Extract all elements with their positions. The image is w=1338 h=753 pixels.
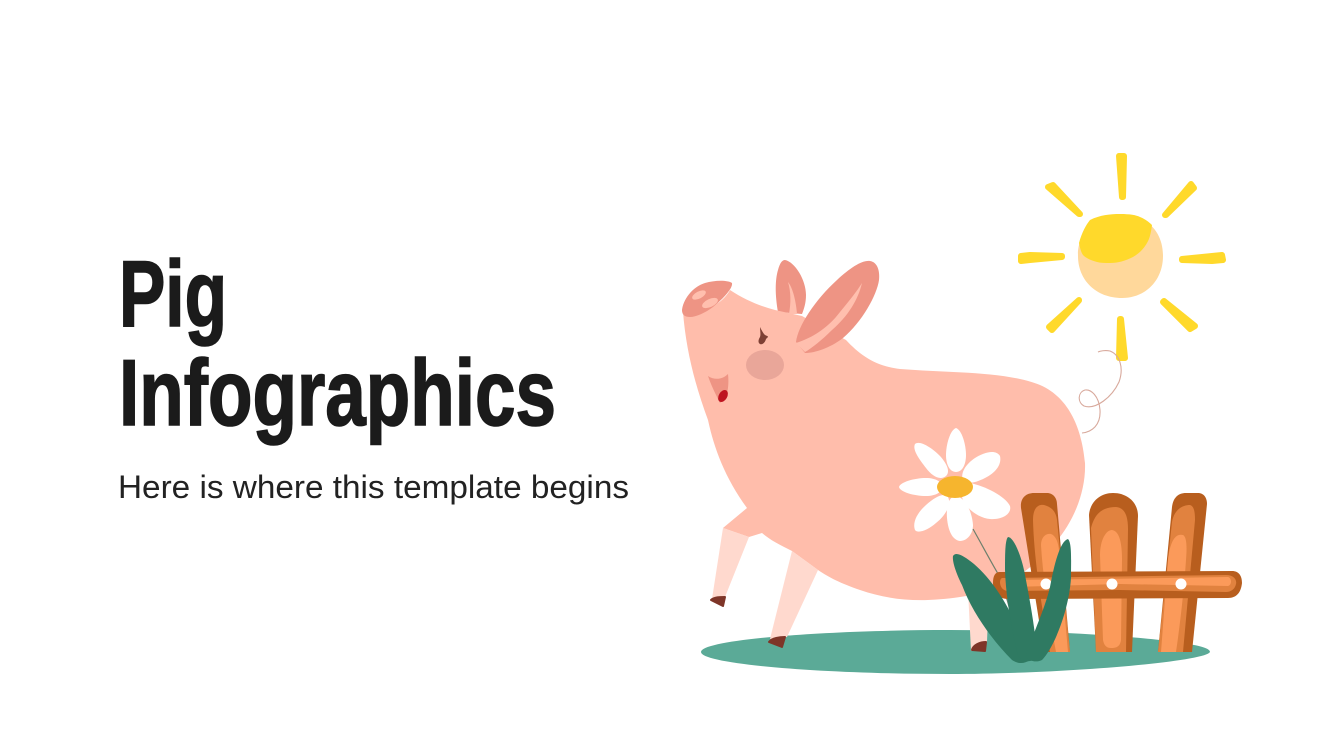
fence post 2 xyxy=(1089,493,1138,652)
middle leg xyxy=(770,551,818,639)
eye xyxy=(758,327,768,344)
small ear xyxy=(776,260,806,314)
fence xyxy=(993,493,1242,652)
middle hoof xyxy=(769,637,785,647)
fence post 3 xyxy=(1158,493,1207,652)
front leg xyxy=(712,528,749,599)
large ear xyxy=(796,261,879,353)
pig tail xyxy=(1079,351,1121,433)
pig xyxy=(682,260,1085,651)
cheek xyxy=(746,350,784,380)
fence rail xyxy=(993,571,1242,599)
flower stem xyxy=(973,529,1016,640)
title: Pig xyxy=(119,241,227,346)
flower centre xyxy=(937,476,973,498)
fence post 1 xyxy=(1021,493,1070,652)
icon: sun xyxy=(1021,156,1223,358)
pig body xyxy=(683,290,1085,600)
flower xyxy=(899,428,1016,640)
subtitle: Here is where this template begins xyxy=(118,469,629,505)
back leg xyxy=(968,590,989,651)
front hoof xyxy=(711,597,725,606)
petals xyxy=(899,428,1010,541)
mouth xyxy=(708,374,730,404)
back hoof xyxy=(972,642,986,651)
grass leaves xyxy=(953,537,1071,663)
ground xyxy=(701,630,1210,674)
title: Infographics xyxy=(119,340,556,445)
snout xyxy=(682,281,732,317)
title xyxy=(119,241,556,445)
